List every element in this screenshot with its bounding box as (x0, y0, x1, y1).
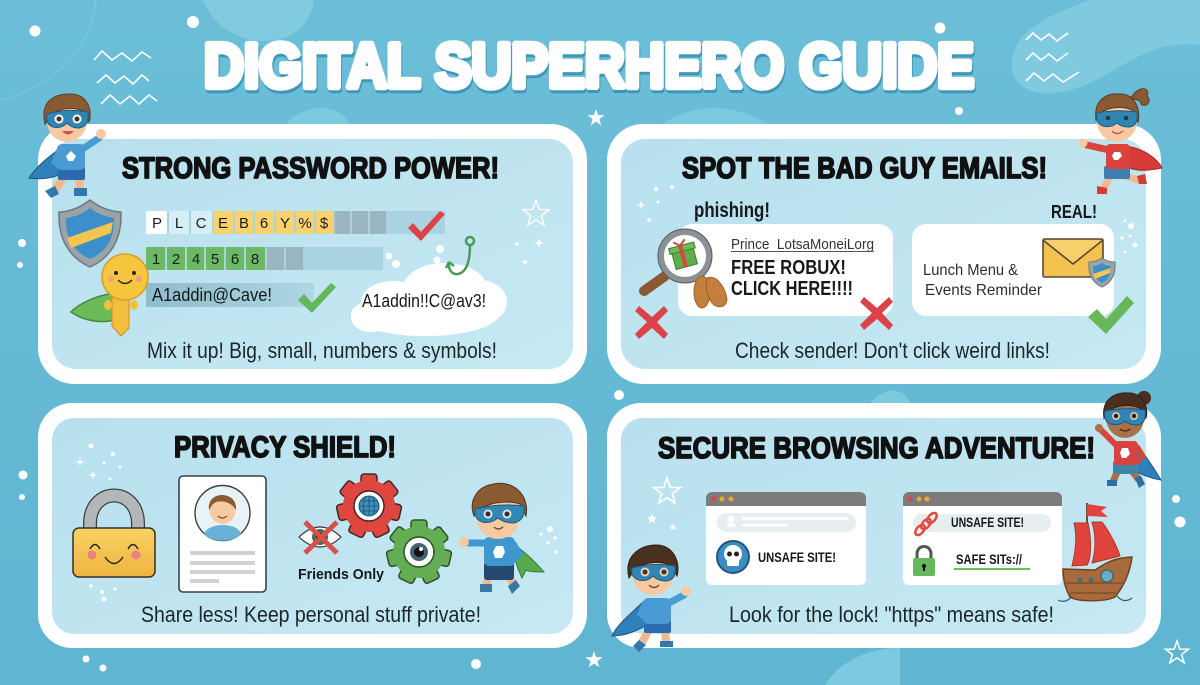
password row: weak: L (175, 215, 183, 232)
password row: numbers: 4 (192, 251, 200, 268)
icon: red x left (635, 306, 668, 339)
character: girl bottom-right (1095, 391, 1161, 488)
icon: star outline (523, 200, 549, 225)
title: DIGITAL SUPERHERO GUIDE (204, 32, 974, 101)
icon: red gear (336, 474, 402, 538)
panel: strong password power (38, 124, 587, 384)
heading: secure browsing: SECURE BROWSING ADVENTURE! (658, 432, 1095, 465)
card: real email: Lunch Menu & (923, 262, 1018, 279)
password row: weak (146, 211, 445, 234)
card: real email (912, 224, 1114, 316)
browser window: safe (903, 492, 1062, 585)
caption: look for the lock: Look for the lock! "https" means safe! (729, 602, 1054, 627)
password row: weak: C (196, 215, 207, 232)
password row: numbers: 6 (231, 251, 239, 268)
panel: spot the bad guy emails (607, 124, 1161, 384)
character: boy bottom-left (612, 545, 691, 652)
panel: secure browsing adventure (607, 403, 1161, 648)
icon: shield (59, 200, 121, 267)
icon: pirate ship (1058, 503, 1132, 601)
password row: numbers (146, 247, 383, 270)
browser window: unsafe (706, 492, 866, 585)
icon: green gear (386, 520, 452, 584)
password row: weak: B (239, 215, 249, 232)
password row: strong (146, 283, 314, 307)
icon: brown mittens (694, 276, 727, 308)
sparkles (75, 444, 558, 602)
password row: weak: % (298, 215, 312, 232)
icon: fish hook (446, 237, 474, 274)
card: phishing email (678, 224, 893, 316)
heading: privacy shield: PRIVACY SHIELD! (174, 431, 396, 464)
label: phishing: phishing! (694, 199, 770, 222)
icon: mini shield (1089, 258, 1115, 287)
caption: mix it up: Mix it up! Big, small, numbers & symbols! (147, 338, 497, 363)
decorative waves right (1026, 33, 1079, 82)
small stars (647, 514, 677, 530)
icon: green check (298, 283, 336, 313)
heading: strong password: STRONG PASSWORD POWER! (122, 152, 499, 185)
caption: check sender: Check sender! Don't click weird links! (735, 338, 1050, 363)
icon: envelope (1043, 239, 1103, 277)
password row: numbers: 1 (152, 251, 160, 268)
decorative waves left (94, 51, 157, 104)
browser window: safe: UNSAFE SITE! (951, 514, 1024, 530)
password row: weak: E (218, 215, 228, 232)
character: boy with green cape (459, 483, 544, 594)
password row: weak: Y (280, 215, 290, 232)
icon: magnifier with gift (644, 229, 712, 291)
card: phishing email: FREE ROBUX! (731, 257, 846, 279)
character: girl top-right (1078, 89, 1162, 194)
cloud with password: A1addin!!C@av3! (362, 291, 486, 311)
icon: green check large (1088, 296, 1134, 334)
icon: red x right (860, 297, 893, 330)
character: boy top-left (29, 94, 106, 198)
cloud with password (351, 245, 507, 336)
label: friends only: Friends Only (298, 566, 385, 583)
sparkles (515, 238, 544, 266)
title: DIGITAL SUPERHERO GUIDE (205, 35, 975, 104)
password row: numbers: 5 (211, 251, 219, 268)
icon: key hero (71, 254, 148, 336)
icon: smiling padlock (73, 496, 155, 577)
password row: weak: 6 (260, 215, 268, 232)
sparkles (636, 185, 1138, 254)
password row: numbers: 8 (251, 251, 259, 268)
password row: weak: $ (320, 215, 329, 232)
heading: bad guy emails: SPOT THE BAD GUY EMAILS! (682, 152, 1047, 185)
password row: weak: P (152, 215, 162, 232)
decorative stars (585, 109, 1188, 667)
password row: numbers: 2 (172, 251, 180, 268)
icon: red check (408, 211, 445, 241)
star outline (654, 478, 680, 503)
card: phishing email: Prince_LotsaMoneiLorg (731, 236, 874, 253)
browser window: safe: SAFE SITs:// (956, 551, 1022, 567)
card: phishing email: CLICK HERE!!!! (731, 278, 853, 300)
label: real: REAL! (1051, 202, 1097, 222)
panel: privacy shield (38, 403, 587, 648)
password row: strong: A1addin@Cave! (152, 285, 272, 305)
card: real email: Events Reminder (925, 282, 1043, 299)
caption: share less: Share less! Keep personal stuff private! (141, 602, 481, 627)
icon: profile card (179, 476, 266, 592)
icon: crossed eye (299, 522, 341, 553)
browser window: unsafe: UNSAFE SITE! (758, 549, 836, 565)
